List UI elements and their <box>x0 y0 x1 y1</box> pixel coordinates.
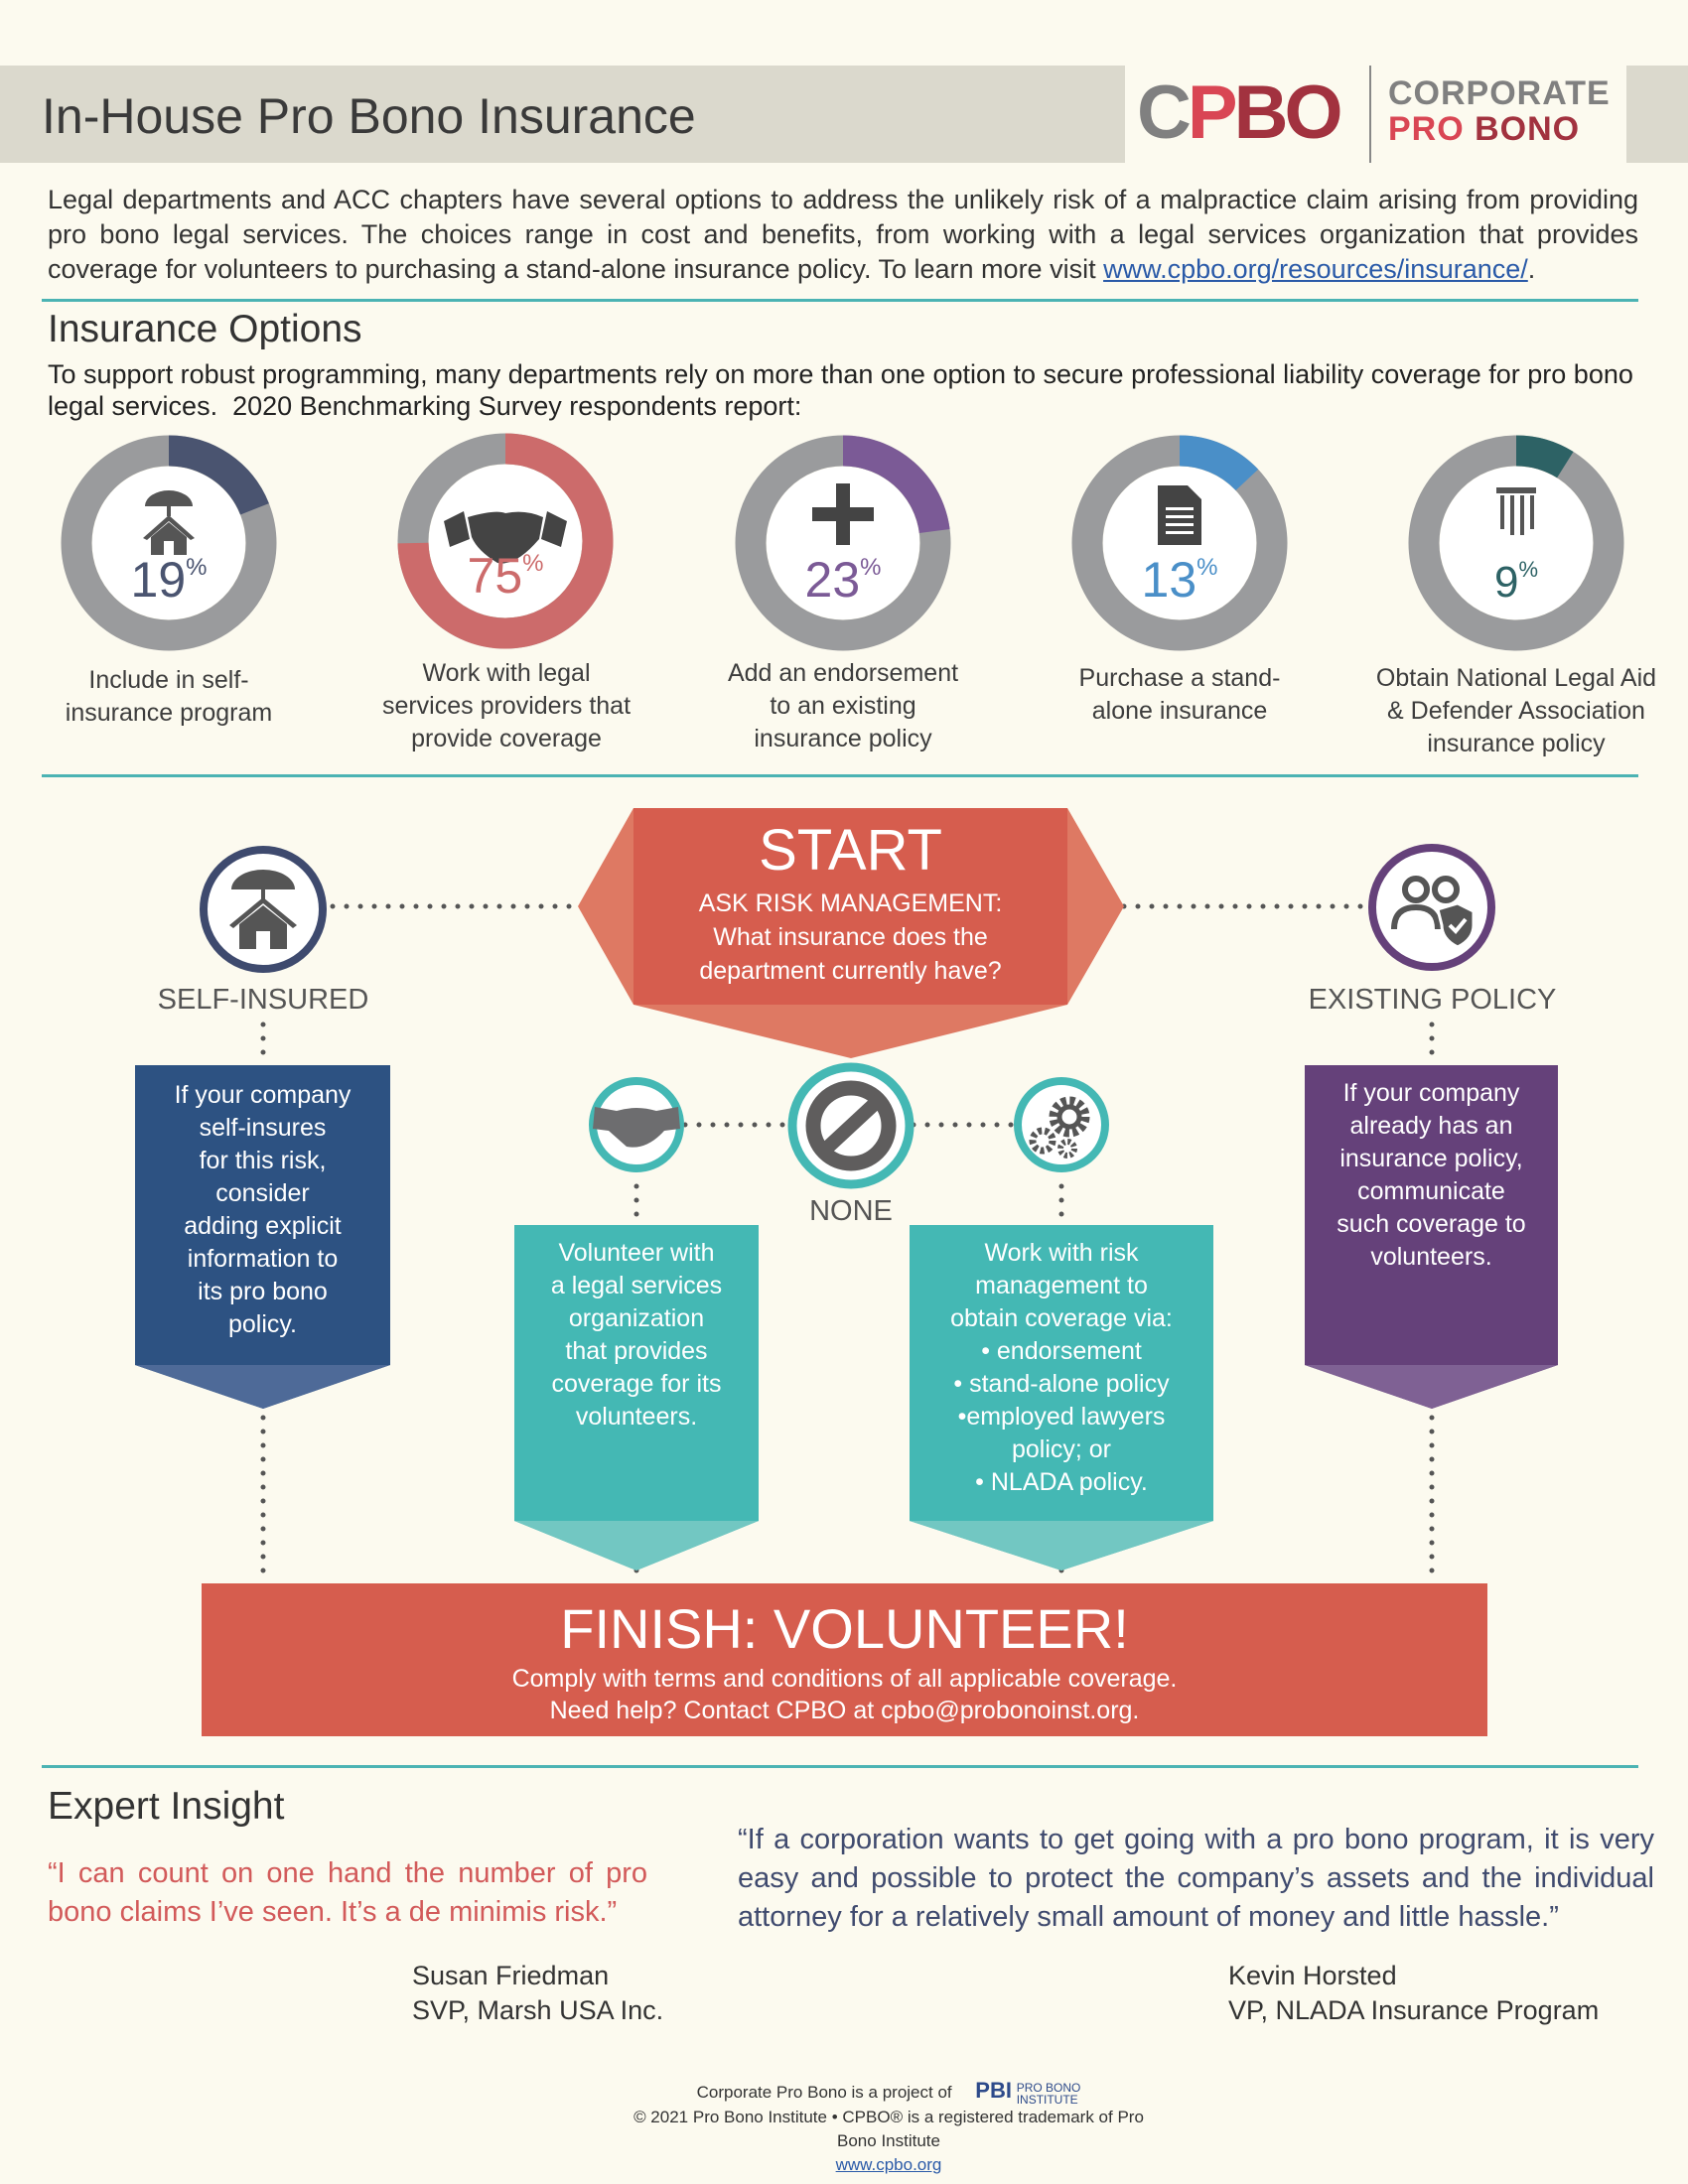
footer: INSTITUTE <box>1017 2093 1078 2107</box>
teal box left <box>514 1225 759 1570</box>
heading: expert insight: Expert Insight <box>48 1785 284 1828</box>
navy box text: self-insures <box>200 1114 326 1142</box>
title: In-House Pro Bono Insurance <box>42 88 696 144</box>
donut labels <box>66 666 272 727</box>
text: Add an endorsement <box>728 659 958 687</box>
purple box text: If your company <box>1343 1079 1519 1107</box>
navy box text: adding explicit <box>184 1212 342 1240</box>
purple box text: communicate <box>1357 1177 1505 1205</box>
purple box text: insurance policy, <box>1339 1145 1523 1172</box>
text: Obtain National Legal Aid <box>1376 664 1656 692</box>
attribution right <box>1228 1961 1599 2025</box>
navy box text: information to <box>188 1245 338 1273</box>
label: existing policy: EXISTING POLICY <box>1309 984 1556 1016</box>
logo: corporate pro bono text: CORPORATE <box>1388 74 1611 112</box>
donut: 75% legal services <box>413 449 598 633</box>
purple box text: such coverage to <box>1336 1210 1526 1238</box>
header band <box>0 66 1688 163</box>
donut: 19% self-insurance: % <box>186 554 207 581</box>
footer <box>633 2078 1144 2174</box>
quote left: “I can count on one hand the number of pro bono claims I’ve seen. It’s a de minimis risk.” <box>48 1857 647 1928</box>
donut: 13% stand-alone <box>1087 451 1272 635</box>
text: insurance policy <box>754 725 932 752</box>
quote right: “If a corporation wants to get going with a pro bono program, it is very easy and possible to protect the company’s assets and the individual attorney for a relatively small amount of money and little hassle.” <box>738 1824 1654 1933</box>
finish text: Comply with terms and conditions of all applicable coverage. <box>512 1665 1177 1693</box>
finish text: Need help? Contact CPBO at cpbo@probonoinst.org. <box>550 1697 1139 1724</box>
text: provide coverage <box>411 725 602 752</box>
icon: self-insured circle <box>204 850 323 969</box>
navy box text: for this risk, <box>200 1147 326 1174</box>
footer: PRO BONO <box>1017 2081 1080 2095</box>
donut: 75% legal services: % <box>522 550 543 577</box>
teal left text: organization <box>569 1304 704 1332</box>
attribution left <box>412 1961 663 2025</box>
attribution right: VP, NLADA Insurance Program <box>1228 1995 1599 2025</box>
footer: © 2021 Pro Bono Institute • CPBO® is a registered trademark of Pro <box>633 2108 1144 2126</box>
text: to an existing <box>770 692 916 720</box>
footer: Bono Institute <box>837 2131 940 2150</box>
start text: ASK RISK MANAGEMENT: <box>699 889 1002 917</box>
text: services providers that <box>382 692 631 720</box>
donut: 13% stand-alone: % <box>1196 554 1217 581</box>
donut: 9% NLADA: 9 <box>1494 558 1518 607</box>
start text <box>699 818 1002 985</box>
teal right text: Work with risk <box>984 1239 1139 1267</box>
teal right text: management to <box>975 1272 1148 1299</box>
donut: 23% endorsement: % <box>860 554 881 581</box>
teal left text: volunteers. <box>576 1403 697 1431</box>
text: Work with legal <box>422 659 591 687</box>
icon: none circle <box>792 1067 910 1184</box>
start text: START <box>759 818 942 883</box>
label: self-insured: SELF-INSURED <box>158 984 368 1016</box>
navy box text: If your company <box>175 1081 351 1109</box>
teal right text <box>950 1239 1173 1496</box>
donut: 13% stand-alone: 13 <box>1142 552 1196 608</box>
logo: corporate pro bono text <box>1388 74 1611 148</box>
donut labels: insurance program <box>66 699 272 727</box>
text: insurance policy <box>1427 730 1606 757</box>
teal right text: • NLADA policy. <box>975 1468 1148 1496</box>
label: none: NONE <box>809 1195 893 1227</box>
text: alone insurance <box>1092 697 1267 725</box>
logo: corporate pro bono text: PRO BONO <box>1388 110 1580 148</box>
teal right text: obtain coverage via: <box>950 1304 1173 1332</box>
teal left text: a legal services <box>551 1272 722 1299</box>
finish text <box>512 1597 1177 1724</box>
logo background <box>1125 66 1626 163</box>
logo divider <box>1369 66 1371 163</box>
teal left text: coverage for its <box>552 1370 721 1398</box>
donut: 9% NLADA <box>1424 451 1609 635</box>
donut: 9% NLADA: % <box>1518 557 1538 582</box>
logo: CPBO: CPBO <box>1137 70 1339 155</box>
heading: insurance options: Insurance Options <box>48 308 362 350</box>
footer: www.cpbo.org <box>836 2155 941 2174</box>
icon: gears circle <box>1018 1081 1105 1168</box>
teal right text: policy; or <box>1012 1435 1111 1463</box>
start shape <box>578 808 1124 1058</box>
teal box right <box>910 1225 1213 1570</box>
donut: 23% endorsement: 23 <box>805 552 860 608</box>
text: & Defender Association <box>1387 697 1645 725</box>
icon: handshake circle <box>593 1081 680 1168</box>
purple box text: volunteers. <box>1370 1243 1492 1271</box>
navy box text: its pro bono <box>198 1278 328 1305</box>
donut: 19% self-insurance: 19 <box>131 552 186 608</box>
finish text: FINISH: VOLUNTEER! <box>560 1597 1129 1660</box>
footer: Corporate Pro Bono is a project of PBI <box>697 2078 1012 2103</box>
donut charts <box>62 433 1624 651</box>
donut: 19% self-insurance <box>76 451 261 635</box>
navy box text: consider <box>215 1179 310 1207</box>
teal left text: Volunteer with <box>558 1239 715 1267</box>
text: Purchase a stand- <box>1079 664 1280 692</box>
start text: What insurance does the <box>713 923 988 951</box>
navy box text <box>175 1081 352 1338</box>
donut labels: Include in self- <box>88 666 249 694</box>
teal right text: • endorsement <box>981 1337 1142 1365</box>
teal left text: that provides <box>565 1337 708 1365</box>
donut: 23% endorsement <box>751 451 935 635</box>
teal right text: •employed lawyers <box>958 1403 1165 1431</box>
finish box <box>202 1583 1487 1736</box>
teal left text <box>551 1239 722 1431</box>
icon: existing policy circle <box>1372 848 1491 967</box>
attribution left: Susan Friedman <box>412 1961 609 1990</box>
purple box text: already has an <box>1349 1112 1513 1140</box>
intro paragraph: Legal departments and ACC chapters have several options to address the unlikely risk of a malpractice claim arising from providing pro bono legal services. The choices range in cost and benefits, from working with a legal services organization that provides coverage for volunteers to purchasing a stand-alone insurance policy. To learn more visit www.cpbo.org/resources/insurance/. <box>48 185 1638 284</box>
attribution left: SVP, Marsh USA Inc. <box>412 1995 663 2025</box>
attribution right: Kevin Horsted <box>1228 1961 1397 1990</box>
purple box <box>1305 1065 1558 1409</box>
purple box text <box>1336 1079 1526 1271</box>
teal right text: • stand-alone policy <box>953 1370 1170 1398</box>
navy box text: policy. <box>228 1310 297 1338</box>
donut: 75% legal services: 75 <box>468 548 522 604</box>
navy box <box>135 1065 390 1409</box>
options paragraph: To support robust programming, many departments rely on more than one option to secure professional liability coverage for pro bono legal services. 2020 Benchmarking Survey respondents report: <box>48 359 1633 421</box>
start text: department currently have? <box>699 957 1002 985</box>
